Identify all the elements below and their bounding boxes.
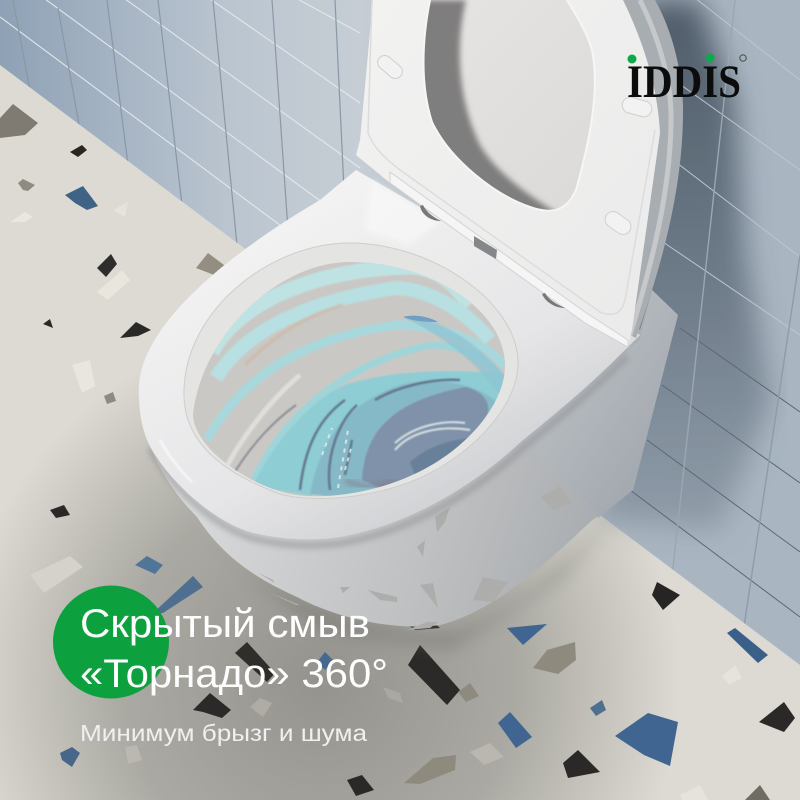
swirl warm tint [345, 480, 395, 487]
vortex foam [395, 422, 470, 450]
rim [139, 170, 640, 539]
bowl opening [184, 243, 518, 499]
heading: «Торнадо» 360° [80, 652, 388, 696]
swirl foam [322, 428, 352, 488]
shadow under rim [150, 356, 627, 545]
shadow under toilet [200, 510, 620, 650]
swirl dark strokes [300, 380, 460, 490]
toilet body [139, 170, 678, 627]
toilet [139, 0, 683, 630]
lid inner lip [368, 0, 655, 314]
lid bumper top left [375, 53, 405, 81]
cyan swirl [253, 371, 508, 496]
hinge chrome centre [474, 236, 497, 259]
vortex mid band [310, 381, 500, 500]
lid outer shell [623, 0, 683, 338]
lid edge highlight [630, 0, 671, 335]
hinge chrome right [542, 293, 565, 308]
lid bumper top right [620, 95, 654, 119]
registered mark [740, 55, 746, 61]
opening shadow [424, 0, 556, 210]
water swirl [193, 262, 505, 496]
hinge bar [390, 172, 628, 347]
shadow of toilet on wall [600, 0, 770, 530]
right side panel [523, 290, 678, 518]
heading: Скрытый смыв [80, 602, 370, 646]
green circle [53, 586, 169, 698]
logo green dots [628, 54, 714, 64]
hinge chrome left [420, 205, 441, 221]
opening edge [424, 0, 595, 211]
subheading: Минимум брызг и шума [80, 720, 367, 746]
seat lid, raised [356, 0, 683, 347]
lid bumper bottom [602, 208, 634, 238]
heading [80, 602, 388, 696]
logo [627, 54, 746, 108]
vortex shadow [410, 438, 466, 474]
deck reflections [365, 180, 440, 245]
upper right ripple [405, 318, 505, 395]
reflected chips in glaze [257, 486, 572, 630]
lid inner opening [424, 0, 594, 210]
logo wordmark: IDDIS [627, 56, 741, 108]
dark vortex [362, 387, 488, 490]
lid white panel [356, 0, 660, 347]
rim highlight [160, 440, 192, 482]
